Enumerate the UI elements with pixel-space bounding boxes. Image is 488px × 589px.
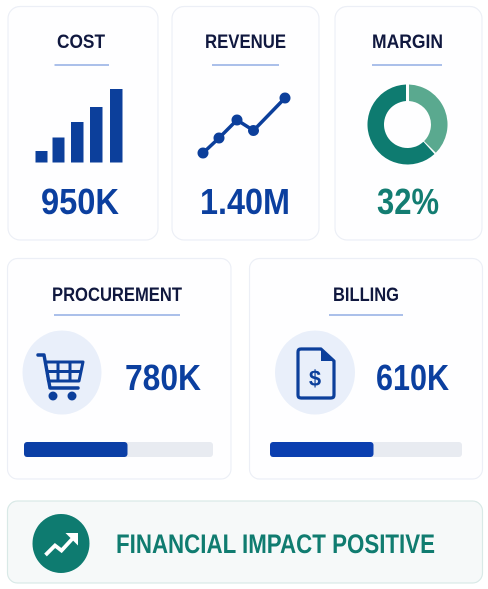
donut chart: margin <box>367 85 448 165</box>
banner text: FINANCIAL IMPACT POSITIVE <box>116 529 435 559</box>
panel: procurement <box>8 258 231 479</box>
bar chart: cost <box>36 89 122 162</box>
heading: revenue: REVENUE <box>205 31 286 53</box>
value: margin: 32% <box>377 181 439 222</box>
heading: procurement: PROCUREMENT <box>52 284 182 306</box>
value: cost: 950K <box>41 181 120 222</box>
heading: cost: COST <box>57 31 105 53</box>
value: revenue: 1.40M <box>200 181 290 222</box>
panel: revenue <box>172 6 319 240</box>
banner: financial impact positive <box>8 501 482 583</box>
progress bar: billing <box>270 442 462 457</box>
icon: trending up arrow <box>32 514 90 573</box>
value: billing: 610K <box>376 357 450 398</box>
value: procurement: 780K <box>125 357 202 398</box>
line chart: revenue <box>198 92 290 158</box>
icon: invoice document <box>275 330 355 414</box>
heading: billing: BILLING <box>333 284 399 306</box>
icon: invoice document: $ <box>309 366 321 391</box>
panel: margin <box>335 6 482 240</box>
heading: margin: MARGIN <box>372 31 443 53</box>
panel: cost <box>8 6 158 240</box>
progress bar: procurement <box>24 442 213 457</box>
icon: shopping cart <box>22 330 102 414</box>
panel: billing <box>250 258 482 479</box>
